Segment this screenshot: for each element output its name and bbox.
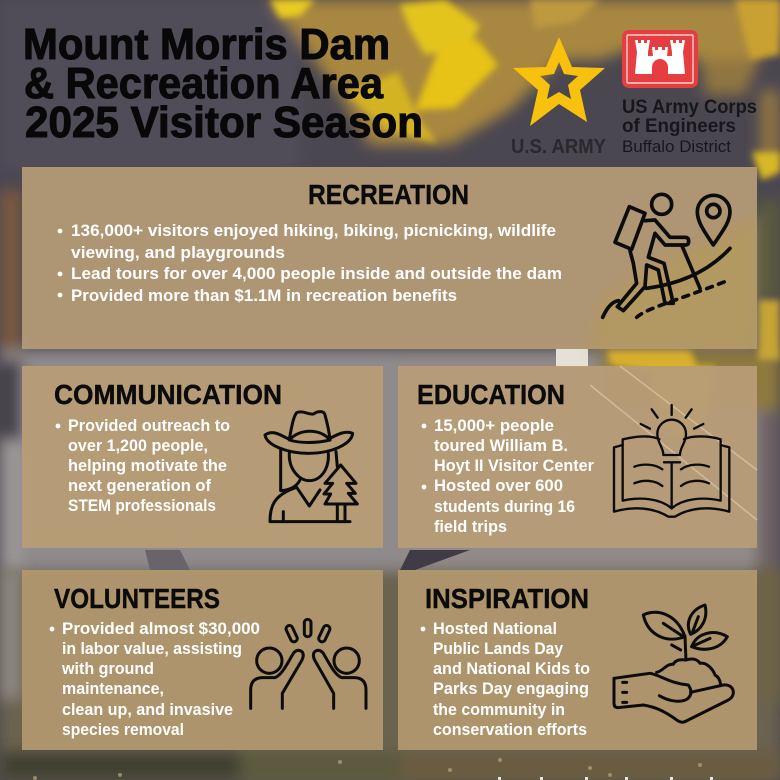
panel: communication (22, 366, 383, 548)
title (23, 20, 423, 147)
text block: volunteers bullets: with ground (61, 659, 154, 678)
logo: US Army Corps of Engineers castle: of Engineers (622, 116, 736, 137)
text block: recreation bullets: Lead tours for over 4,000 people inside and outside the dam (71, 264, 562, 283)
panel: recreation (22, 167, 757, 349)
heading: volunteers: VOLUNTEERS (54, 583, 220, 614)
text block: education bullets: Hoyt II Visitor Center (434, 456, 594, 475)
text block: volunteers bullets: clean up, and invasive (62, 700, 233, 719)
logo: US Army Corps of Engineers castle: US Army Corps (622, 97, 757, 118)
text block: education bullets: Hosted over 600 (434, 476, 563, 495)
logo: US Army Corps of Engineers castle (622, 30, 757, 156)
text block: communication bullets: STEM professionals (68, 496, 216, 515)
text block: volunteers bullets (50, 619, 260, 739)
text block: education bullets: toured William B. (434, 436, 568, 455)
text block: inspiration bullets: conservation efforts (433, 720, 587, 739)
icon: hand holding seedling (614, 605, 733, 722)
text block: education bullets (422, 416, 594, 536)
text block: volunteers bullets: in labor value, assisting (62, 639, 242, 658)
text block: inspiration bullets: Parks Day engaging (433, 679, 589, 698)
icon: high five (251, 619, 366, 708)
text block: communication bullets (56, 416, 230, 515)
panel: education (398, 366, 757, 548)
dam light column (556, 349, 588, 367)
text block: recreation bullets: viewing, and playgrounds (71, 243, 285, 262)
text block: volunteers bullets: Provided almost $30,000 (62, 619, 260, 638)
text block: recreation bullets: 136,000+ visitors enjoyed hiking, biking, picnicking, wildlife (71, 221, 556, 240)
text block: inspiration bullets: Hosted National (433, 619, 557, 638)
title: Mount Morris Dam (23, 20, 390, 69)
text block: communication bullets: next generation of (68, 476, 211, 495)
logo: U.S. Army star: U.S. ARMY (511, 136, 607, 158)
title: & Recreation Area (24, 59, 384, 108)
heading: communication: COMMUNICATION (54, 379, 282, 410)
text block: volunteers bullets: maintenance, (62, 679, 164, 698)
text block: recreation bullets (58, 221, 562, 305)
text block: education bullets: 15,000+ people (434, 416, 554, 435)
heading: inspiration: INSPIRATION (425, 583, 589, 614)
logo: US Army Corps of Engineers castle: Buffalo District (622, 138, 731, 156)
panel: inspiration (398, 570, 757, 750)
title: 2025 Visitor Season (25, 98, 423, 147)
text block: education bullets: field trips (434, 517, 507, 536)
logo: U.S. Army star (511, 37, 607, 158)
text block: communication bullets: helping motivate the (68, 456, 227, 475)
icon: open book with light bulb (614, 405, 729, 517)
text block: inspiration bullets: Public Lands Day (433, 639, 563, 658)
text block: inspiration bullets (421, 619, 590, 739)
text block: inspiration bullets: the community in (433, 700, 565, 719)
icon: hiker with map pin (603, 194, 730, 317)
text block: inspiration bullets: and National Kids to (433, 659, 590, 678)
text block: communication bullets: Provided outreach to (68, 416, 230, 435)
heading: education: EDUCATION (417, 379, 565, 410)
text block: volunteers bullets: species removal (62, 720, 184, 739)
heading: recreation: RECREATION (308, 179, 469, 210)
text block: communication bullets: over 1,200 people, (68, 436, 208, 455)
text block: education bullets: students during 16 (434, 497, 575, 516)
text block: recreation bullets: Provided more than $1.1M in recreation benefits (71, 286, 457, 305)
icon: woman with cowboy hat and tree (265, 412, 357, 522)
panel: volunteers (22, 570, 383, 750)
